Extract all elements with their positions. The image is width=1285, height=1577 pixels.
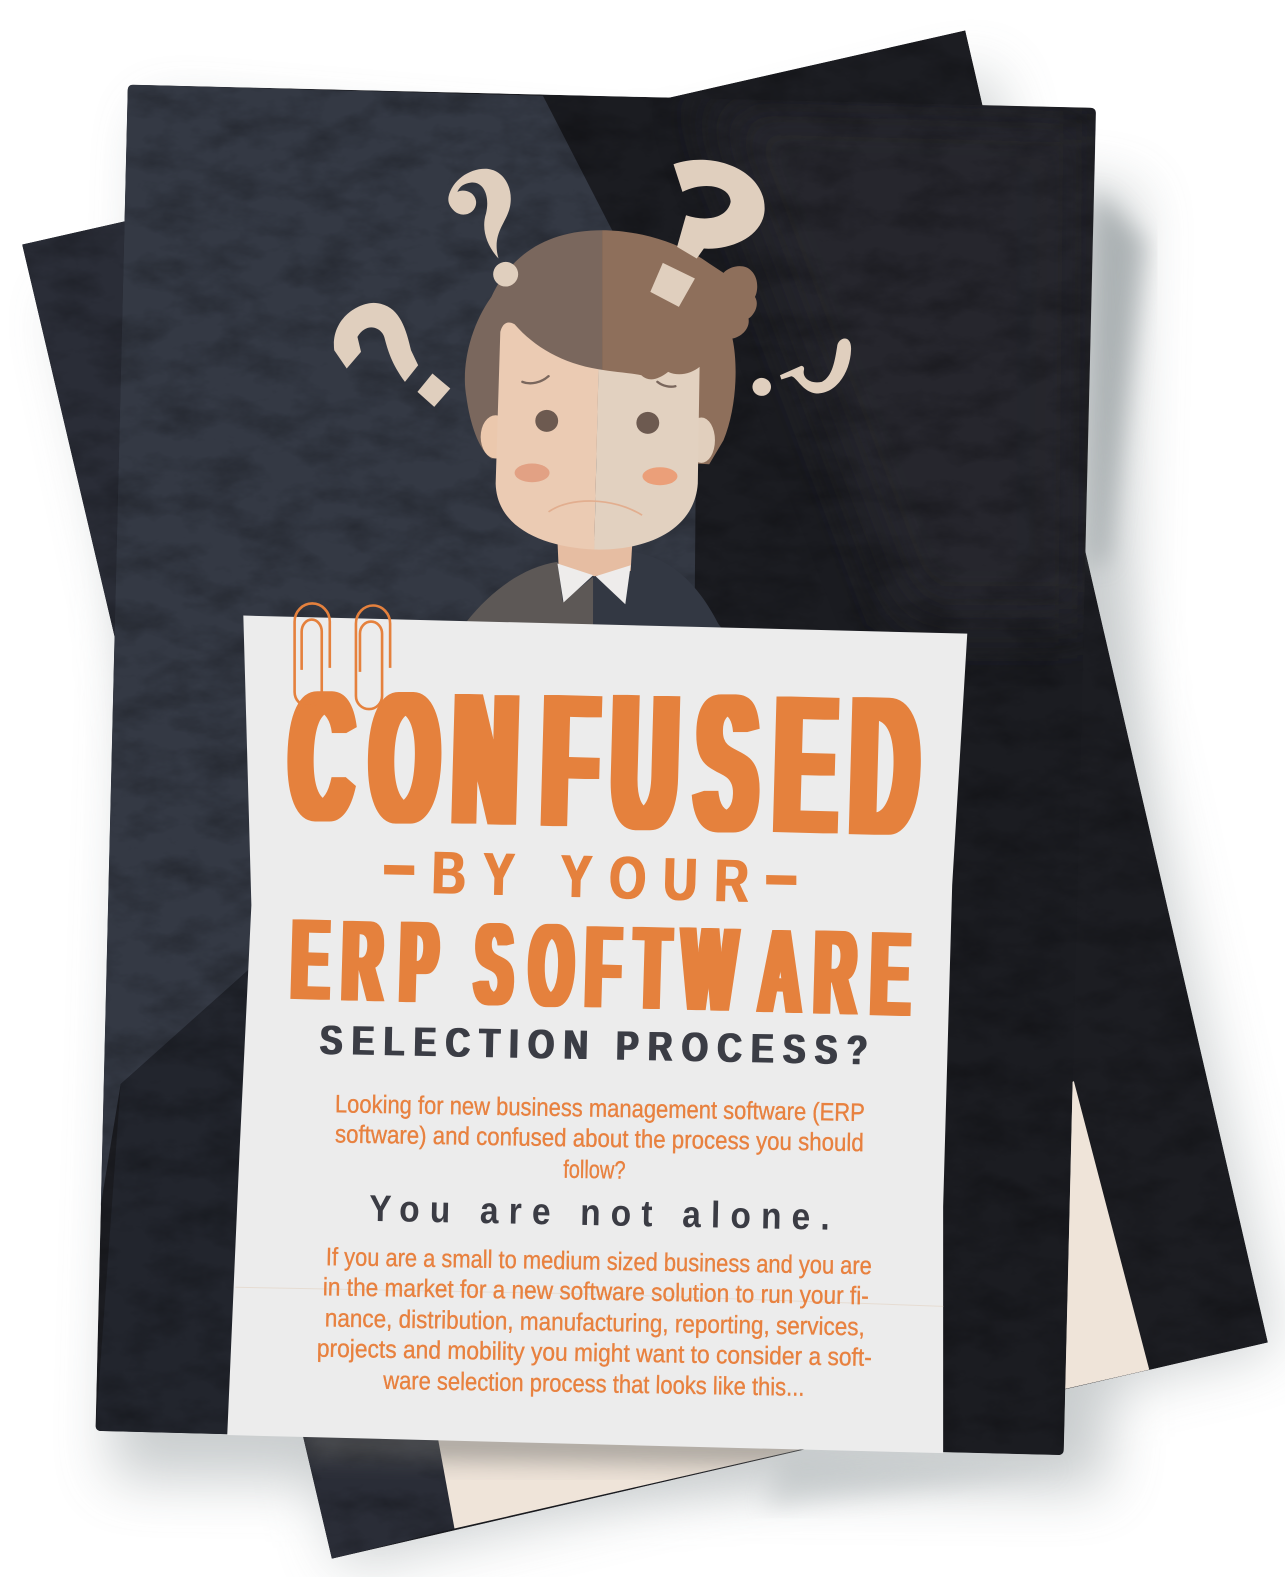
title: CONFUSED: S <box>694 655 760 874</box>
body paragraph: If you are a small to medium sized business and you are <box>326 1243 872 1280</box>
front cover light fold panel <box>101 85 726 1207</box>
soft shadow of front book on page <box>1091 191 1146 563</box>
title: CONFUSED: F <box>541 655 600 868</box>
upper right cover shading <box>740 105 1096 610</box>
title: ERP SOFTWARE <box>291 890 911 1042</box>
title: ERP SOFTWARE: R <box>813 905 858 1040</box>
title: ERP SOFTWARE: E <box>291 895 330 1025</box>
title: ERP SOFTWARE: O <box>528 901 575 1032</box>
question mark left <box>334 303 450 407</box>
title: ERP SOFTWARE: P <box>399 898 439 1028</box>
body paragraph <box>317 1243 872 1402</box>
title: CONFUSED: U <box>610 653 680 870</box>
body paragraph: nance, distribution, manufacturing, reporting, services, <box>325 1304 865 1341</box>
paperclip right <box>356 606 390 709</box>
neck <box>557 540 632 576</box>
you are not alone: You are not alone. <box>369 1188 830 1238</box>
title: SELECTION PROCESS: SELECTION PROCESS? <box>320 1017 868 1073</box>
body paragraph: ware selection process that looks like this... <box>382 1367 805 1402</box>
shadow cast by front book on back book <box>304 1437 804 1478</box>
front cover lower left panel <box>96 965 253 1438</box>
title: ERP SOFTWARE: S <box>474 900 514 1031</box>
question mark large top right <box>650 160 765 307</box>
body paragraph: projects and mobility you might want to consider a soft- <box>317 1335 872 1372</box>
intro paragraph: Looking for new business management software (ERP <box>335 1090 865 1127</box>
cheeks <box>515 464 677 485</box>
title: CONFUSED: E <box>773 653 839 876</box>
right dash <box>766 875 796 885</box>
paper sheet <box>227 616 967 1453</box>
cover grime texture <box>90 81 1106 1458</box>
eyebrows <box>522 376 675 387</box>
title: ERP SOFTWARE: W <box>681 901 738 1037</box>
title: CONFUSED: O <box>369 653 441 863</box>
face <box>496 323 700 550</box>
title: ERP SOFTWARE: E <box>870 906 911 1042</box>
question mark right <box>752 339 851 396</box>
shoulders and jacket <box>466 552 720 627</box>
title: ERP SOFTWARE: A <box>758 903 803 1039</box>
title: CONFUSED: C <box>288 653 355 860</box>
shirt collar <box>557 564 631 604</box>
body paragraph: in the market for a new software solution to run your fi- <box>323 1273 869 1310</box>
title: ERP SOFTWARE: T <box>634 901 671 1035</box>
ears <box>481 415 715 463</box>
intro paragraph: software) and confused about the process you should <box>335 1120 864 1157</box>
confused man illustration <box>334 160 851 627</box>
title: CONFUSED <box>288 639 921 878</box>
question mark top left <box>448 169 518 287</box>
back book left cover panel <box>22 222 454 1559</box>
front cover dark base <box>96 85 1096 1455</box>
title: CONFUSED: N <box>451 655 519 866</box>
back book paper sheet <box>432 1081 1149 1529</box>
front book <box>90 81 1106 1458</box>
title: ERP SOFTWARE: R <box>341 897 384 1027</box>
paperclip left <box>295 603 330 706</box>
intro paragraph: follow? <box>563 1156 626 1185</box>
title: ERP SOFTWARE: F <box>584 902 622 1034</box>
hair <box>465 230 757 464</box>
BY YOUR wording: BY YOUR <box>431 840 750 915</box>
paperclips <box>295 603 390 709</box>
intro paragraph <box>335 1090 865 1185</box>
eyes <box>535 410 659 434</box>
title: BY YOUR <box>384 840 796 915</box>
mouth <box>549 501 642 515</box>
left dash <box>384 865 414 875</box>
title: CONFUSED: D <box>848 654 921 878</box>
